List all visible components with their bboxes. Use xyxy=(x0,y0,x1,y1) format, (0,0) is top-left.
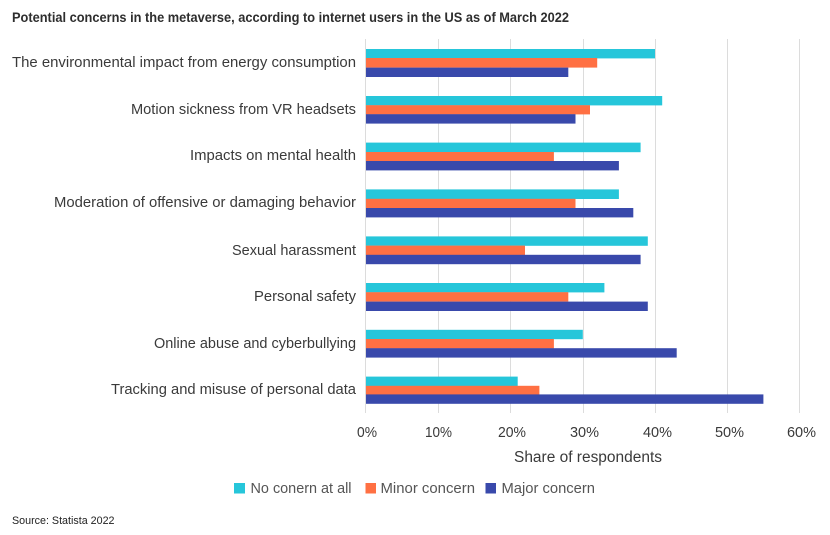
category: moderation xyxy=(54,189,633,217)
x axis tick labels: 50% xyxy=(715,424,744,441)
category: tracking and misuse xyxy=(111,377,763,404)
legend xyxy=(234,480,595,497)
bar chart xyxy=(12,49,763,404)
category: mental health xyxy=(190,143,641,170)
category: motion sickness xyxy=(131,96,662,124)
category: environmental impact: The environmental impact from energy consumption xyxy=(12,54,356,71)
category: online abuse: Online abuse and cyberbullying xyxy=(154,335,356,352)
x axis tick labels xyxy=(357,424,816,441)
category: motion sickness: Motion sickness from VR headsets xyxy=(131,101,356,118)
source: Source: Statista 2022 xyxy=(12,515,114,527)
legend item: major concern: Major concern xyxy=(502,480,595,497)
category: sexual harassment xyxy=(232,236,648,264)
category: tracking and misuse: Tracking and misuse of personal data xyxy=(111,381,357,398)
x axis tick labels: 30% xyxy=(570,424,599,441)
x axis title: Share of respondents xyxy=(514,449,662,466)
x axis tick labels: 10% xyxy=(425,424,452,441)
legend item: no concern: No conern at all xyxy=(250,480,352,497)
category: moderation: Moderation of offensive or damaging behavior xyxy=(54,194,356,211)
legend item: minor concern: Minor concern xyxy=(380,480,475,497)
x axis tick labels: 20% xyxy=(498,424,526,441)
category: online abuse xyxy=(154,330,677,358)
category: sexual harassment: Sexual harassment xyxy=(232,242,357,259)
x axis tick labels: 40% xyxy=(643,424,672,441)
category: mental health: Impacts on mental health xyxy=(190,147,356,164)
x axis tick labels: 0% xyxy=(357,424,377,441)
category: environmental impact xyxy=(12,49,655,77)
category: personal safety: Personal safety xyxy=(254,288,356,305)
title: Potential concerns in the metaverse, according to internet users in the US as of March 2022 xyxy=(12,9,569,25)
x axis tick labels: 60% xyxy=(787,424,816,441)
category: personal safety xyxy=(254,283,648,311)
